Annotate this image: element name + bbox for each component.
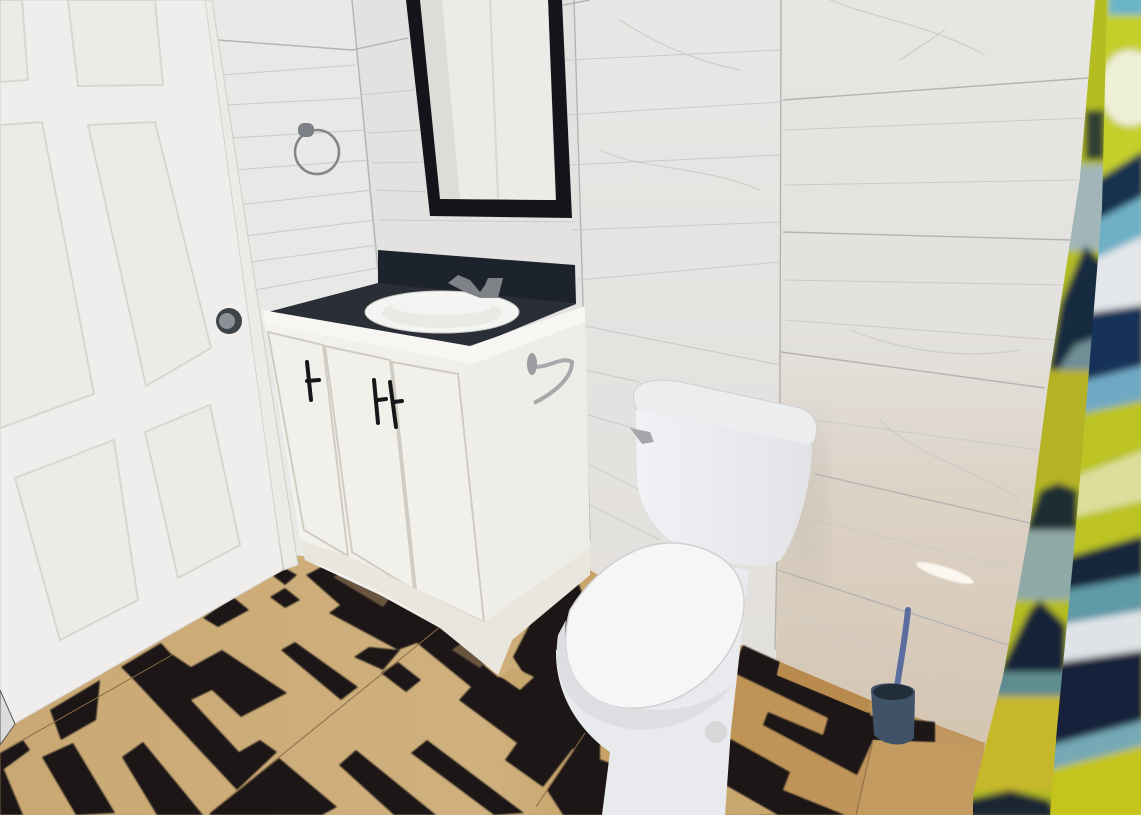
marble veins <box>600 0 1020 700</box>
dark under cabinet <box>306 565 585 787</box>
door frame <box>196 0 298 570</box>
toilet base <box>556 560 749 815</box>
towel ring <box>295 123 339 174</box>
towel bar <box>528 360 572 403</box>
backsplash <box>378 250 576 304</box>
tile floor <box>0 555 985 815</box>
curtain right panel <box>1040 0 1141 815</box>
dark right of toilet <box>732 645 873 775</box>
toilet brush <box>871 610 915 744</box>
shower curtain <box>960 0 1141 815</box>
tank lid <box>634 380 817 448</box>
toilet bolt cap <box>705 721 727 743</box>
sink <box>365 275 519 333</box>
door <box>0 0 283 745</box>
door stop trim <box>0 690 15 745</box>
toilet seat <box>566 543 744 708</box>
door panels <box>0 0 240 640</box>
countertop <box>268 283 576 348</box>
vanity cabinet <box>262 306 590 675</box>
cabinet doors <box>268 332 484 622</box>
toilet <box>556 380 817 815</box>
wall shadow behind toilet <box>783 410 827 590</box>
tank <box>636 410 812 566</box>
tiled wall <box>200 0 1100 800</box>
flush lever <box>630 428 654 444</box>
cabinet handles <box>307 362 402 427</box>
curtain left fold <box>973 0 1107 815</box>
door knob <box>216 308 242 334</box>
base arch <box>300 540 590 675</box>
mirror <box>406 0 572 218</box>
wall highlight <box>915 558 975 588</box>
